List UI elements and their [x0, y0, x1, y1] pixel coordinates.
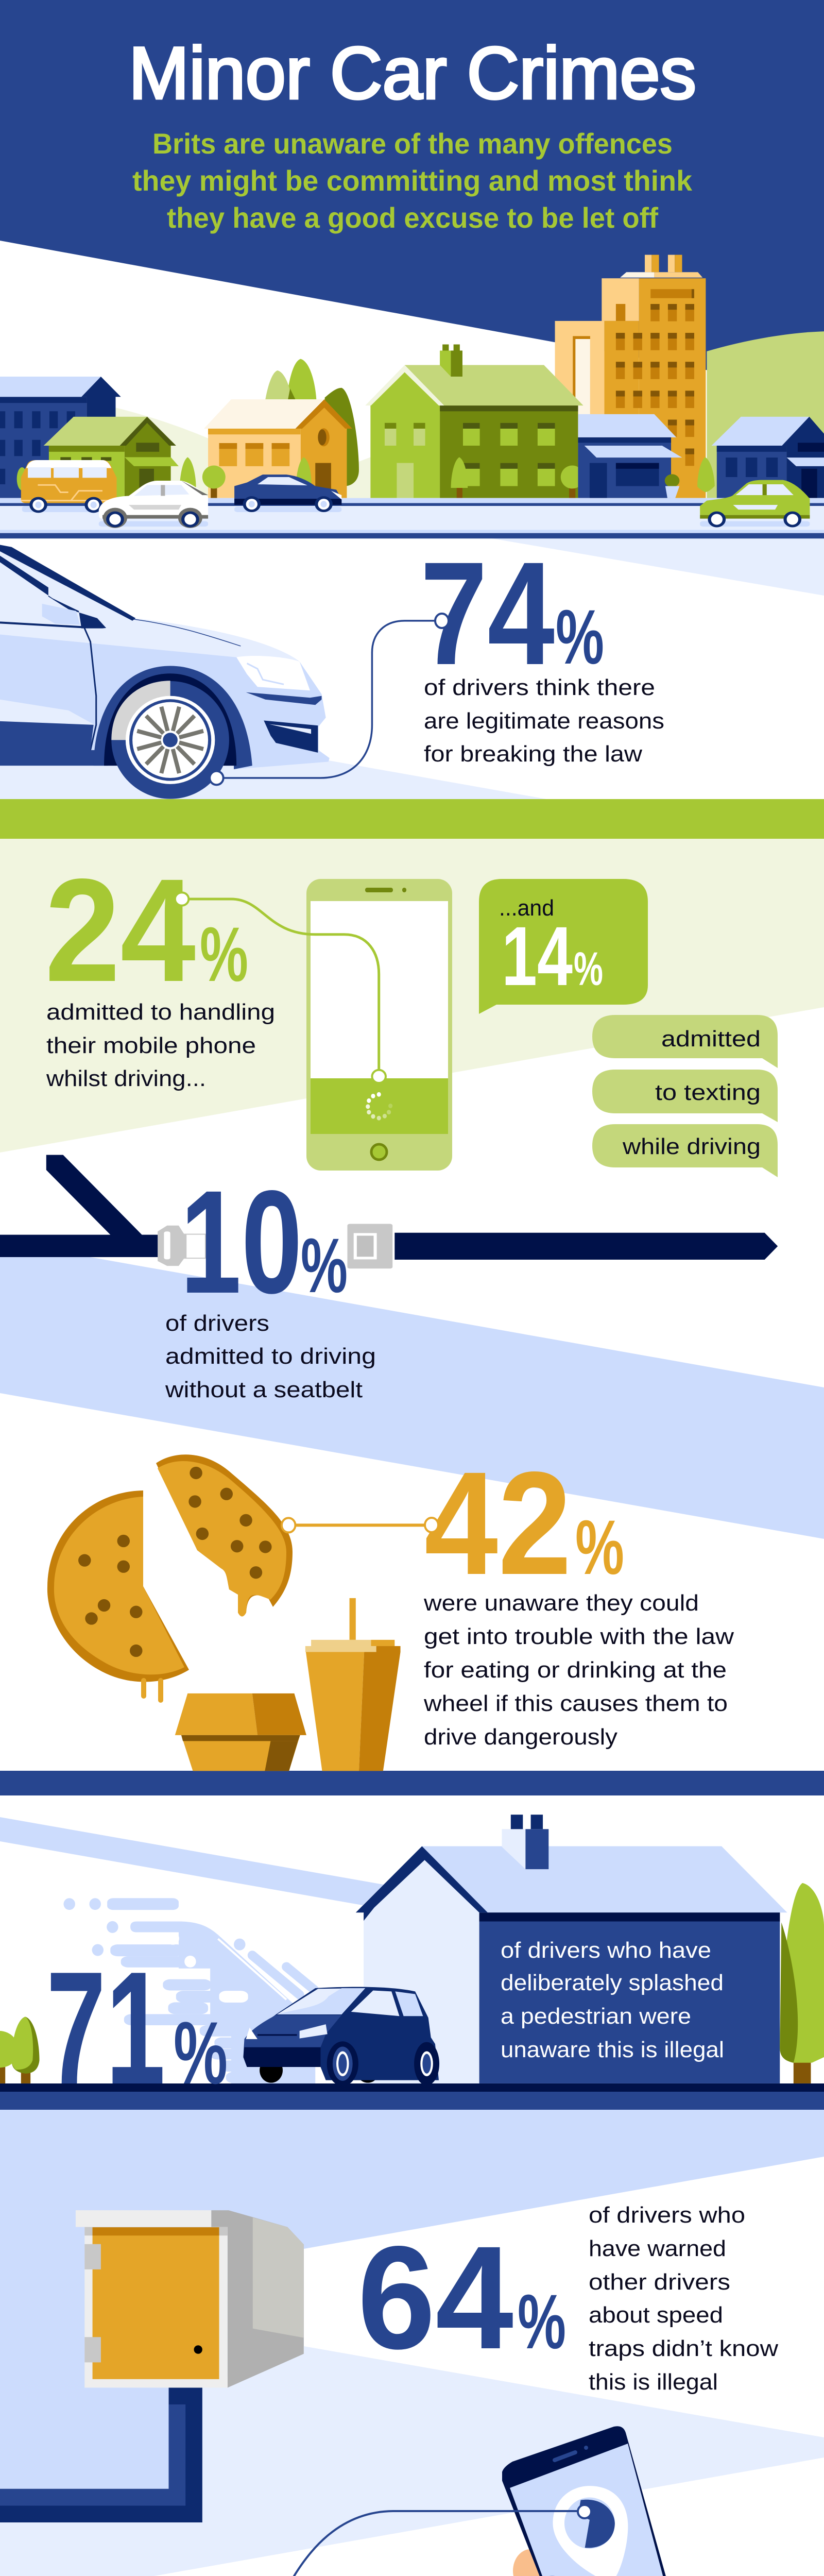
icon: green car — [700, 480, 810, 527]
text: legitimate reasons — [424, 675, 664, 767]
speech bubble: while driving — [592, 1124, 778, 1177]
stat: 74%: % — [556, 594, 604, 680]
icon: house — [356, 1815, 787, 2083]
road — [0, 498, 824, 538]
text: handling phone — [46, 999, 275, 1091]
text: handling phone: their mobile phone — [46, 1033, 256, 1058]
panel: seatbelt — [0, 1155, 778, 1402]
text: splashing: deliberately splashed — [501, 1970, 724, 1995]
stat: 10%: % — [301, 1222, 348, 1309]
illustration: town street scene — [0, 255, 824, 538]
building: right blue house — [697, 417, 824, 498]
building: small green house — [44, 417, 179, 498]
text: eating and drinking: for eating or drinking at the — [424, 1657, 727, 1683]
text: eating and drinking: drive dangerously — [424, 1724, 617, 1750]
icon: white car — [99, 481, 208, 528]
icon: smartphone — [306, 879, 452, 1171]
building: orange house — [204, 399, 352, 498]
text: legitimate reasons: for breaking the law — [424, 741, 642, 767]
stat: 71%: 71 — [46, 1939, 165, 2118]
text: eating and drinking: wheel if this causes them to — [423, 1691, 728, 1716]
text: eating and drinking: were unaware they could — [423, 1590, 699, 1616]
building: blue shop — [578, 414, 682, 498]
text: splashing — [501, 1938, 724, 2062]
stat: 64%: 64 — [357, 2216, 514, 2380]
speech bubble: while driving: while driving — [622, 1134, 761, 1159]
speech bubble: to texting: to texting — [655, 1080, 761, 1105]
connector line — [175, 892, 386, 1083]
icon: phone with map pin — [502, 2426, 686, 2576]
stat: 24%: % — [200, 911, 248, 997]
connector end node — [435, 614, 449, 628]
stat: 42%: % — [575, 1504, 624, 1590]
icon: orange van — [17, 460, 117, 513]
text: speed traps: about speed — [589, 2302, 723, 2328]
panel: sat nav — [44, 2426, 824, 2576]
speech bubble: to texting — [592, 1070, 778, 1122]
icon: seatbelt strap and buckle — [0, 1155, 778, 1268]
text: splashing: unaware this is illegal — [501, 2037, 724, 2062]
connector line — [282, 1518, 431, 1532]
icon: blue hatchback car — [243, 1987, 439, 2086]
text: speed traps: this is illegal — [589, 2369, 718, 2395]
icon: pizza slices — [47, 1454, 293, 1700]
text: seatbelt — [165, 1311, 376, 1402]
speech bubble: admitted — [592, 1015, 778, 1068]
connector line — [170, 2505, 591, 2576]
panel: 74 percent legitimate reasons — [0, 532, 664, 799]
speech bubble: 14%: % — [574, 943, 603, 995]
subtitle — [132, 127, 693, 234]
text: speed traps: other drivers — [589, 2269, 730, 2295]
panel: speed traps — [0, 2202, 778, 2522]
subtitle: they might be committing and most think — [132, 164, 693, 197]
text: splashing: of drivers who have — [501, 1938, 711, 1963]
speech bubble: 14%: ...and — [499, 895, 554, 921]
text: eating and drinking — [423, 1590, 734, 1750]
text: handling phone: admitted to handling — [46, 999, 275, 1025]
connector line — [210, 621, 441, 785]
building: large green house — [365, 345, 584, 498]
text: speed traps — [589, 2202, 778, 2395]
text: speed traps: traps didn’t know — [589, 2336, 778, 2361]
speech bubble: 14%: 14 — [502, 909, 573, 1003]
text: seatbelt: admitted to driving — [165, 1344, 376, 1369]
stat: 10%: 10 — [180, 1160, 302, 1324]
text: seatbelt: without a seatbelt — [165, 1377, 363, 1402]
icon: trees behind orange house — [265, 359, 359, 486]
icon: speed camera — [0, 2210, 304, 2522]
speech bubble: 14% — [479, 879, 648, 1014]
building: tower block — [555, 255, 706, 498]
illustration: car front close-up — [0, 545, 441, 799]
stat: 71%: % — [174, 2004, 228, 2103]
title: Minor Car Crimes — [129, 32, 696, 114]
icon: burger box and drink cup — [175, 1598, 401, 1771]
building: left navy block — [0, 377, 121, 498]
text: splashing: a pedestrian were — [501, 2004, 691, 2029]
stat: 24%: 24 — [45, 849, 197, 1012]
stat: 74%: 74 — [420, 532, 555, 696]
text: seatbelt: of drivers — [165, 1311, 269, 1336]
text: speed traps: have warned — [589, 2236, 726, 2261]
subtitle: Brits are unaware of the many offences — [152, 127, 673, 160]
text: eating and drinking: get into trouble with the law — [424, 1624, 734, 1649]
icon: blue car — [234, 474, 341, 512]
illustration: hand and sleeve — [513, 2549, 824, 2576]
subtitle: they have a good excuse to be let off — [167, 201, 658, 234]
stat: 64%: % — [518, 2278, 566, 2365]
text: legitimate reasons: of drivers think there — [424, 675, 655, 700]
panel: eating and drinking — [47, 1442, 734, 1771]
icon: trees — [0, 1883, 824, 2083]
stat: 42%: 42 — [424, 1442, 572, 1605]
speech bubble: admitted: admitted — [661, 1026, 761, 1052]
connector end node — [425, 1518, 438, 1532]
panel: splashing pedestrian — [0, 1815, 824, 2118]
text: speed traps: of drivers who — [589, 2202, 745, 2228]
illustration: water splash — [63, 1898, 315, 2083]
text: handling phone: whilst driving... — [46, 1066, 206, 1091]
panel: mobile phone — [45, 849, 778, 1177]
icon: small trees — [180, 457, 312, 498]
text: legitimate reasons: are legitimate reasons — [424, 708, 664, 734]
